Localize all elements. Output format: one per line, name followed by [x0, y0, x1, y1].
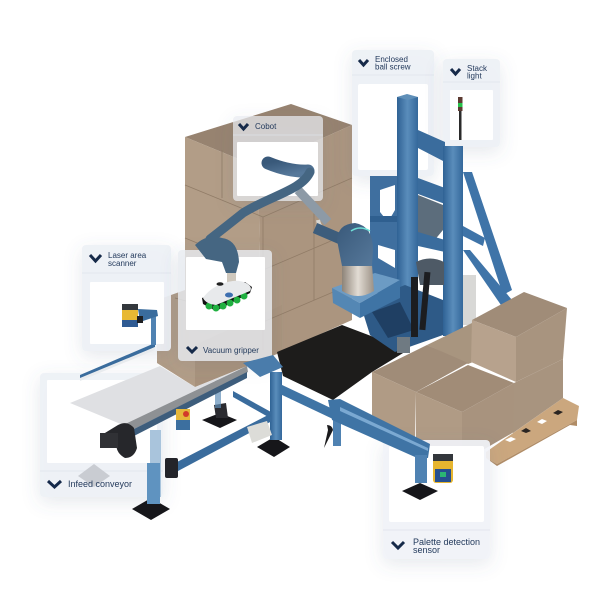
infeed conveyor caption — [48, 479, 132, 489]
box: upper — [472, 292, 567, 337]
black table — [277, 325, 408, 400]
arm: elbow connector — [315, 228, 343, 240]
frame: base interior — [360, 285, 443, 352]
box: front right — [416, 365, 514, 412]
icon: chevron — [187, 347, 197, 352]
machine frame — [332, 94, 512, 353]
frame: braces — [418, 130, 445, 252]
vacuum gripper product — [202, 273, 252, 312]
box stack behind the cobot — [157, 104, 352, 387]
card: laser area scanner — [82, 245, 171, 351]
icon: chevron — [451, 69, 460, 74]
frame: motor drum — [463, 275, 476, 325]
infeed conveyor and legs — [70, 355, 290, 520]
frame: rear diagonal — [463, 172, 512, 295]
frame: base platform — [332, 273, 400, 303]
front leg — [147, 463, 160, 504]
palette detection sensor — [433, 454, 453, 483]
icon: chevron — [239, 124, 248, 129]
robot arm — [195, 163, 374, 296]
conveyor motor — [100, 423, 137, 458]
pallet — [486, 398, 579, 466]
frame: cable chain — [411, 277, 418, 337]
card: vacuum gripper — [178, 250, 272, 361]
frame: back plate — [370, 176, 397, 300]
label: enclosed ball screw: Enclosed — [375, 55, 408, 64]
label: cobot: Cobot — [255, 122, 277, 131]
card: infeed conveyor — [40, 373, 163, 497]
rear leg — [270, 372, 282, 440]
icon: chevron — [392, 542, 404, 548]
arm: wrist — [195, 237, 239, 273]
arm: upper link — [210, 172, 310, 239]
frame: front column — [443, 146, 463, 336]
stack light product — [458, 97, 462, 140]
frame: dark panel — [418, 195, 443, 242]
icon: chevron — [48, 481, 61, 487]
connector — [165, 458, 178, 478]
label: palette detection sensor: sensor — [413, 545, 440, 555]
label: stack light: Stack — [467, 64, 487, 73]
label: laser area scanner: scanner — [108, 259, 137, 268]
right box stack — [372, 292, 567, 462]
frame: white gaps — [418, 244, 442, 262]
emergency stop — [176, 409, 190, 430]
arm: lower link — [298, 190, 328, 222]
label: laser area scanner: Laser area — [108, 251, 146, 260]
rails — [177, 414, 272, 471]
box: lower right — [513, 359, 563, 433]
frame: lower strut — [397, 337, 410, 353]
label: infeed conveyor: Infeed conveyor — [68, 479, 132, 489]
arm: base — [342, 265, 374, 296]
label: palette detection sensor: Palette detection — [413, 537, 480, 547]
label: stack light: light — [467, 72, 482, 80]
card: palette detection sensor — [383, 440, 490, 559]
card: enclosed ball screw — [352, 50, 434, 176]
label: vacuum gripper: Vacuum gripper — [203, 346, 259, 355]
label: enclosed ball screw: ball screw — [375, 62, 411, 72]
card: cobot — [233, 116, 323, 201]
arm: shoulder — [337, 223, 373, 266]
front leg, seen through card — [150, 430, 161, 497]
card: stack light — [443, 59, 500, 147]
conveyor belt — [70, 366, 247, 425]
frame: central column — [397, 97, 418, 317]
box: front left — [372, 345, 468, 392]
right infeed rail and sensor post — [280, 384, 453, 500]
icon: chevron — [90, 255, 101, 261]
laser area scanner product — [80, 304, 158, 381]
icon: chevron — [359, 60, 368, 65]
arm: top link — [268, 163, 308, 171]
leg feet — [132, 498, 170, 520]
